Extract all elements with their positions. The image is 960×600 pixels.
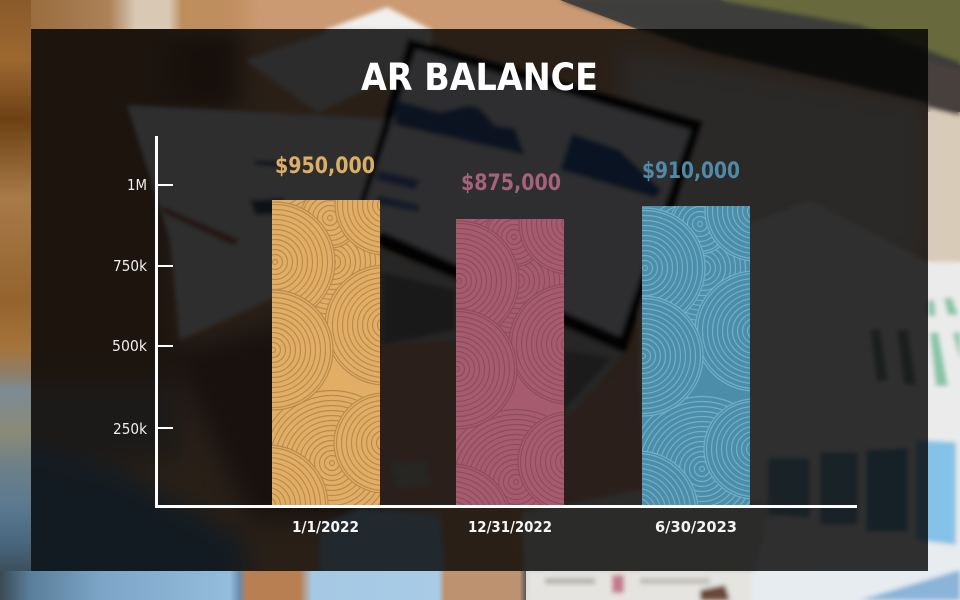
title: AR BALANCE [361, 56, 598, 99]
y axis labels: 500k [112, 337, 147, 355]
category labels: 12/31/2022 [468, 518, 552, 536]
value labels: $950,000 [275, 154, 375, 179]
bar: 6/30/2023 [642, 206, 750, 505]
y axis labels: 750k [113, 257, 147, 275]
value labels [275, 154, 740, 196]
value labels: $910,000 [642, 159, 740, 184]
y axis labels: 250k [113, 420, 147, 438]
photo edge strips [0, 0, 31, 600]
value labels: $875,000 [461, 171, 561, 196]
bar: 12/31/2022 [456, 219, 564, 505]
y axis labels [112, 176, 147, 438]
y axis labels: 1M [127, 176, 147, 194]
category labels: 1/1/2022 [292, 518, 359, 536]
category labels [292, 518, 737, 536]
category labels: 6/30/2023 [655, 518, 737, 536]
y axis with ticks [155, 136, 173, 508]
bar: 1/1/2022 [272, 200, 380, 505]
bar chart [112, 136, 857, 536]
x axis [155, 505, 857, 508]
